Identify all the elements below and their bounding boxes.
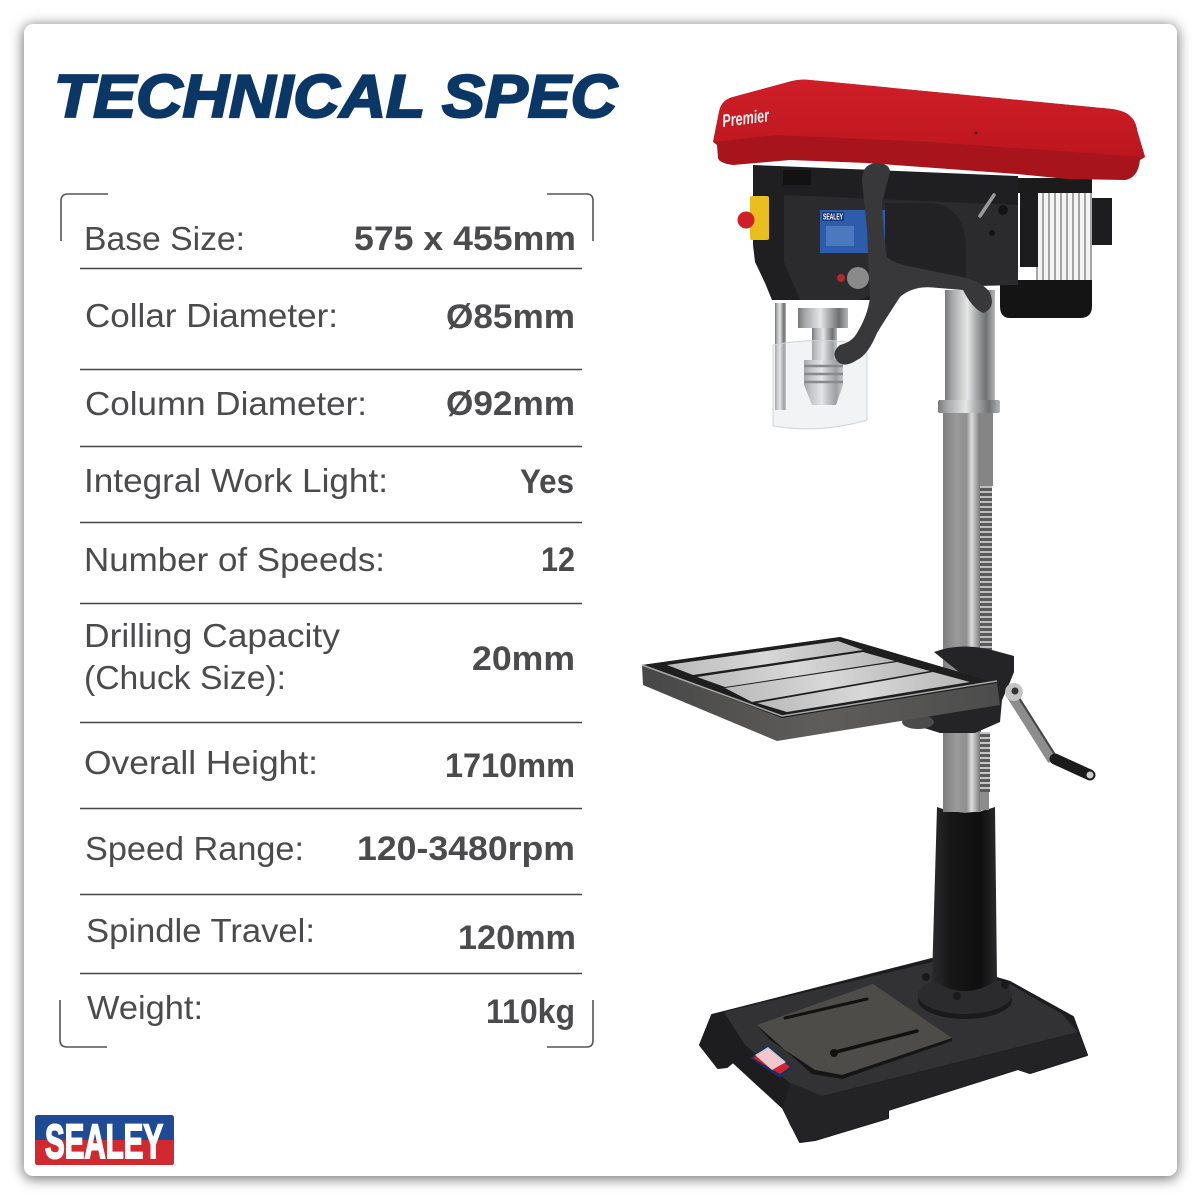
black column sleeve — [932, 807, 997, 991]
table corner brackets — [60, 194, 593, 1047]
illustration: pillar drill — [642, 80, 1145, 1142]
row: integral work light: Yes — [520, 463, 574, 501]
row: speed range: Speed Range: — [85, 830, 304, 867]
speed lever — [980, 195, 994, 216]
table clamp — [900, 646, 1014, 733]
row: number of speeds: 12 — [541, 541, 575, 579]
base sticker — [750, 1045, 793, 1078]
row: base size: Base Size: — [84, 220, 245, 257]
logo: Sealey: SEALEY — [45, 1116, 163, 1169]
column collar — [938, 400, 1000, 413]
row: spindle travel: 120mm — [458, 919, 576, 957]
row: drilling capacity: 20mm — [472, 640, 575, 678]
column flange — [918, 973, 1012, 1019]
row: integral work light: Integral Work Light: — [84, 462, 388, 499]
drill base — [700, 959, 1087, 1142]
table slots — [667, 641, 970, 712]
row: weight: Weight: — [87, 989, 203, 1026]
spec table — [60, 194, 593, 1047]
title: TECHNICAL SPEC — [54, 63, 619, 130]
depth knob — [847, 267, 869, 289]
clear chuck guard — [773, 340, 867, 429]
row: column diameter: Column Diameter: — [85, 385, 367, 422]
logo: Sealey — [35, 1115, 174, 1169]
row: collar diameter — [85, 297, 575, 336]
stop switch — [738, 196, 769, 240]
row: spindle travel — [86, 912, 576, 957]
row: column diameter: Ø92mm — [446, 385, 575, 423]
rating plate — [820, 210, 885, 253]
motor — [1000, 178, 1112, 318]
row: number of speeds — [84, 541, 575, 579]
row: weight — [87, 989, 575, 1031]
base plate — [757, 984, 952, 1079]
row: collar diameter: Ø85mm — [446, 298, 575, 336]
row: drilling capacity: Drilling Capacity — [84, 617, 341, 654]
row: weight: 110kg — [486, 993, 575, 1031]
row: collar diameter: Collar Diameter: — [85, 297, 338, 334]
row: speed range — [85, 830, 575, 868]
chuck — [804, 360, 843, 405]
rating plate: SEALEY — [823, 212, 843, 222]
rack housing — [980, 412, 993, 486]
row: drilling capacity: (Chuck Size): — [84, 659, 286, 696]
feed handle — [834, 163, 992, 365]
spindle collar — [798, 308, 848, 328]
row: overall height: Overall Height: — [84, 744, 318, 781]
row: column diameter — [85, 385, 575, 423]
spindle shaft — [812, 328, 837, 360]
crank handle — [1005, 683, 1094, 778]
head body — [738, 165, 1018, 300]
row: number of speeds: Number of Speeds: — [84, 541, 385, 578]
brand text: Premier — [721, 105, 771, 131]
row: speed range: 120-3480rpm — [357, 830, 575, 868]
row: spindle travel: Spindle Travel: — [86, 912, 315, 949]
row: drilling capacity — [84, 617, 575, 696]
red top cover — [713, 80, 1145, 180]
row: overall height: 1710mm — [445, 747, 575, 785]
spindle guide rod — [775, 303, 786, 410]
lower steel column — [943, 410, 981, 812]
row: base size: 575 x 455mm — [354, 220, 576, 258]
row: integral work light — [84, 462, 574, 501]
rack teeth — [980, 486, 992, 810]
upper steel column — [945, 290, 995, 402]
row: overall height — [84, 744, 575, 785]
work table — [642, 637, 1000, 741]
row: base size — [84, 220, 576, 258]
